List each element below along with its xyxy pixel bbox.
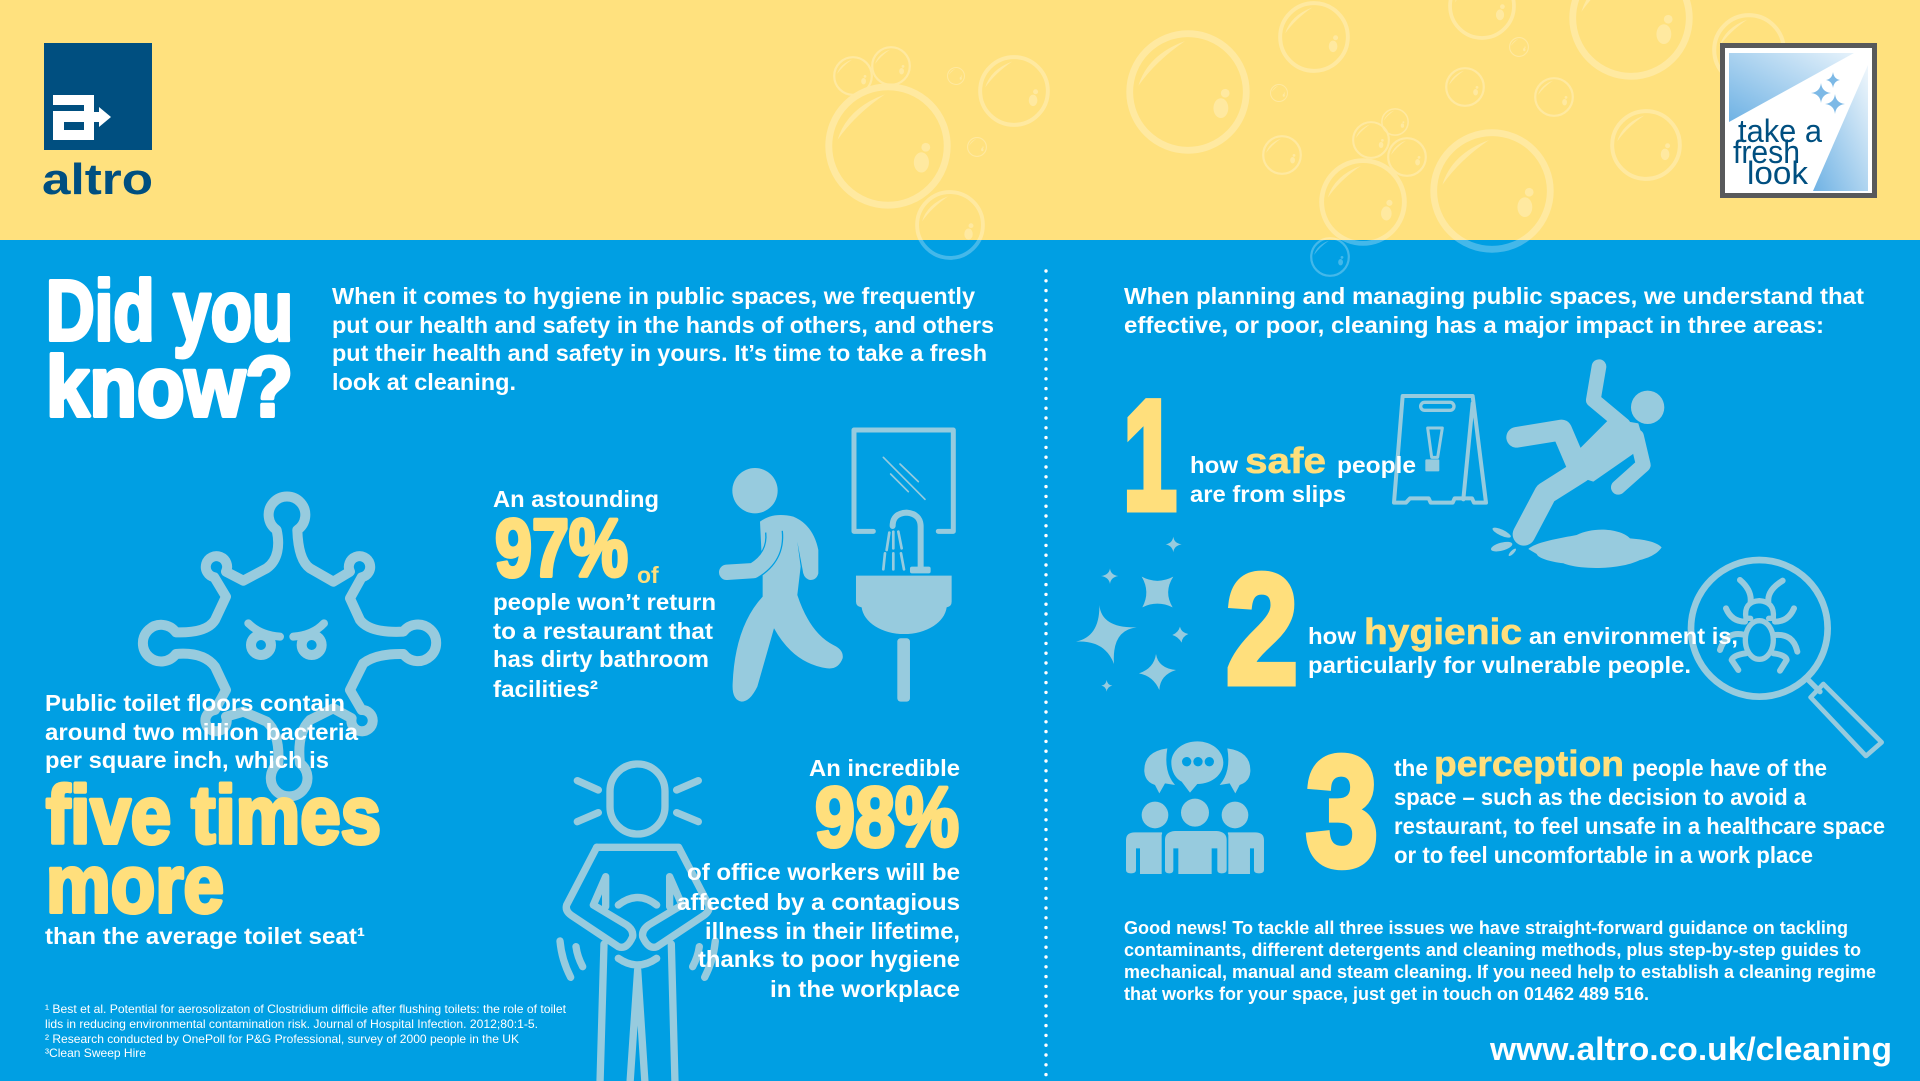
number: 98%: 98% — [815, 770, 959, 864]
text: than the average toilet seat: than the average toilet seat¹ — [45, 923, 365, 949]
panel: 1 safe — [1123, 367, 1664, 568]
text: how safe people: are from slips — [1190, 481, 1346, 507]
text: how hygienic: hygienic — [1364, 611, 1522, 652]
text: the perception: space – such as the decision to avoid a — [1394, 784, 1806, 810]
panel: 2 hygienic — [1076, 537, 1882, 756]
text: toilet floors — [45, 690, 358, 773]
text: people won't return: to a restaurant that — [493, 618, 713, 644]
icon: magnifying glass with bug — [1691, 560, 1882, 756]
text: people won't return: facilities² — [493, 676, 598, 702]
text: good news: mechanical, manual and steam cleaning. If you need help to establish a cleaning regime — [1124, 962, 1876, 982]
icon: wet floor sign and falling person — [1394, 367, 1664, 568]
text: the perception — [1394, 743, 1885, 868]
text: the perception: people have of the — [1632, 755, 1827, 781]
dotted divider — [1044, 271, 1048, 1081]
logo: altro: altro — [42, 155, 153, 204]
logo: take a fresh look: fresh — [1733, 134, 1800, 170]
text: an astounding: An astounding — [493, 486, 659, 512]
intro text left: When it comes to hygiene in public spaces, we frequently — [332, 283, 975, 309]
title: Did you know?: know? — [46, 340, 293, 435]
number: 97%: 97% — [495, 503, 628, 594]
text: office workers: illness in their lifetime, — [705, 918, 960, 944]
text: good news: contaminants, different detergents and cleaning methods, plus step-by-step guides to — [1124, 940, 1861, 960]
icon: angry bacteria — [143, 497, 436, 796]
stat: five times more: more — [46, 839, 224, 930]
intro text right — [1124, 283, 1864, 338]
text: how safe people: people — [1337, 452, 1416, 478]
panel: 98% stat — [560, 755, 960, 1081]
text: people won't return: has dirty bathroom — [493, 646, 709, 672]
text: people won't return: people won’t return — [493, 589, 716, 615]
panel: 3 perception — [1126, 725, 1885, 899]
header band: yellow — [0, 0, 1920, 240]
stat: five times more: five times — [46, 770, 381, 861]
website url: www.altro.co.uk/cleaning — [1489, 1031, 1892, 1067]
text: toilet floors: around two million bacteria — [45, 719, 358, 745]
text: the perception: restaurant, to feel unsafe in a healthcare space — [1394, 813, 1885, 839]
text: people won't return — [493, 589, 716, 702]
text: office workers — [677, 859, 960, 1002]
number: 3: 3 — [1306, 725, 1378, 899]
text: of: of — [637, 562, 659, 588]
intro text right: When planning and managing public spaces, we understand that — [1124, 283, 1864, 309]
text: how hygienic — [1308, 611, 1738, 678]
text: good news: Good news! To tackle all three issues we have straight-forward guidance on tackling — [1124, 918, 1848, 938]
icon: sparkles — [1076, 537, 1188, 692]
footnotes: ² Research conducted by OnePoll for P&G Professional, survey of 2000 people in the UK — [45, 1032, 519, 1046]
icon: people talking — [1126, 741, 1264, 874]
panel: public toilet floors — [45, 497, 436, 949]
text: office workers: of office workers will be — [687, 859, 960, 885]
text: how hygienic: an environment is, — [1529, 623, 1738, 649]
text: how safe people — [1190, 440, 1416, 507]
text: an incredible: An incredible — [809, 755, 960, 781]
intro text left — [332, 283, 994, 395]
text: the perception: perception — [1434, 743, 1624, 784]
text: how hygienic: how — [1308, 623, 1356, 649]
text: the perception: the — [1394, 755, 1428, 781]
number: 1: 1 — [1123, 369, 1177, 543]
title: Did you know? — [46, 264, 293, 435]
text: how hygienic: particularly for vulnerable people. — [1308, 652, 1691, 678]
logo: take a fresh look: look — [1747, 155, 1809, 191]
logo: take a fresh look: take a — [1738, 113, 1822, 149]
text: office workers: thanks to poor hygiene — [698, 946, 960, 972]
text: toilet floors: Public toilet floors contain — [45, 690, 345, 716]
text: how safe people: how — [1190, 452, 1238, 478]
footnotes — [45, 1002, 567, 1060]
icon: person with stomach ache — [560, 764, 715, 1081]
footnotes: lids in reducing environmental contamination risk. Journal of Hospital Infection. 2012;80:1-5. — [45, 1017, 538, 1031]
icon: person walking away from sink — [727, 430, 953, 702]
number: 2: 2 — [1226, 543, 1298, 717]
intro text left: look at cleaning. — [332, 369, 516, 395]
logo: take a fresh look — [1722, 46, 1874, 196]
footnotes: ³Clean Sweep Hire — [45, 1046, 146, 1060]
text: office workers: in the workplace — [770, 976, 960, 1002]
text: toilet floors: per square inch, which is — [45, 747, 329, 773]
title: Did you know?: Did you — [46, 264, 293, 359]
stat: five times more — [46, 770, 381, 930]
intro text right: effective, or poor, cleaning has a major impact in three areas: — [1124, 312, 1824, 338]
text: good news: that works for your space, just get in touch on 01462 489 516. — [1124, 984, 1649, 1004]
footnotes: ¹ Best et al. Potential for aerosolizaton of Clostridium difficile after flushing toilets: the role of toilet — [45, 1002, 567, 1016]
text: office workers: affected by a contagious — [677, 889, 960, 915]
intro text left: put their health and safety in yours. It’s time to take a fresh — [332, 340, 987, 366]
panel: 97% stat — [493, 430, 953, 702]
text: how safe people: safe — [1245, 440, 1326, 481]
logo: altro — [42, 43, 153, 204]
soap bubbles — [829, 0, 1784, 276]
text: the perception: or to feel uncomfortable in a work place — [1394, 842, 1813, 868]
text: good news — [1124, 918, 1876, 1004]
intro text left: put our health and safety in the hands of others, and others — [332, 312, 994, 338]
